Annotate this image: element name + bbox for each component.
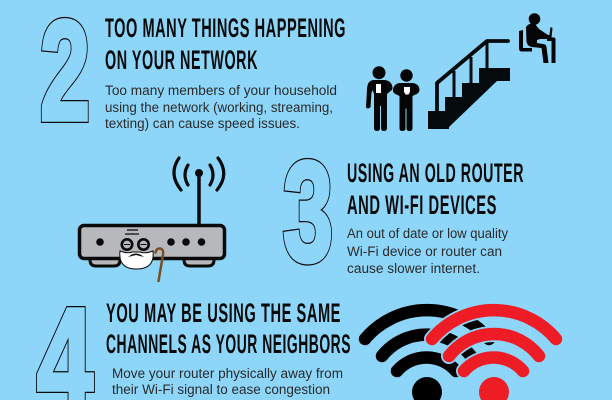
heading: channels [106,298,351,359]
heading: channels: CHANNELS AS YOUR NEIGHBORS [106,329,351,359]
heading: channels: YOU MAY BE USING THE SAME [106,298,341,328]
icon: two standing people [366,66,420,131]
status lights [96,238,205,246]
heading: network [105,13,346,75]
body text: network: using the network (working, streaming, [105,100,333,115]
heading: network: ON YOUR NETWORK [105,45,258,75]
body text: network: texting) can cause speed issues. [105,116,300,131]
heading: network: TOO MANY THINGS HAPPENING [105,13,346,43]
body text: old router: cause slower internet. [347,261,480,276]
icon: staircase [428,41,510,129]
panel: same channels as neighbors [37,278,556,400]
body text: old router [347,226,508,276]
panel: too many things on network [40,0,556,150]
numeral 4 [37,278,93,400]
heading: old router: AND WI-FI DEVICES [347,190,497,220]
body text: channels: Move your router physically away from [112,366,343,381]
cane [156,248,163,281]
icon: person at desk with laptop [519,13,556,63]
icon: red wifi signal [432,310,556,400]
antenna [174,158,224,226]
router feet [90,257,214,266]
router body [80,226,224,258]
body text: channels [112,366,343,397]
old man face [120,230,153,269]
person one [366,66,392,131]
numeral 2 [40,0,90,150]
body text: old router: An out of date or low quality [347,226,508,241]
body text: network: Too many members of your household [105,83,337,98]
numeral 3 [283,132,333,292]
icon: old router with glasses, beard and cane [80,158,224,281]
heading: old router [347,158,524,220]
numeral 3: 3 [283,132,333,292]
person two [393,69,420,131]
body text: channels: their Wi-Fi signal to ease congestion [112,382,330,397]
numeral 3: 3 [283,132,333,292]
panel: old router [80,132,524,292]
icon: black wifi signal [365,310,489,400]
body text: network [105,83,337,131]
body text: old router: Wi-Fi device or router can [347,244,502,259]
